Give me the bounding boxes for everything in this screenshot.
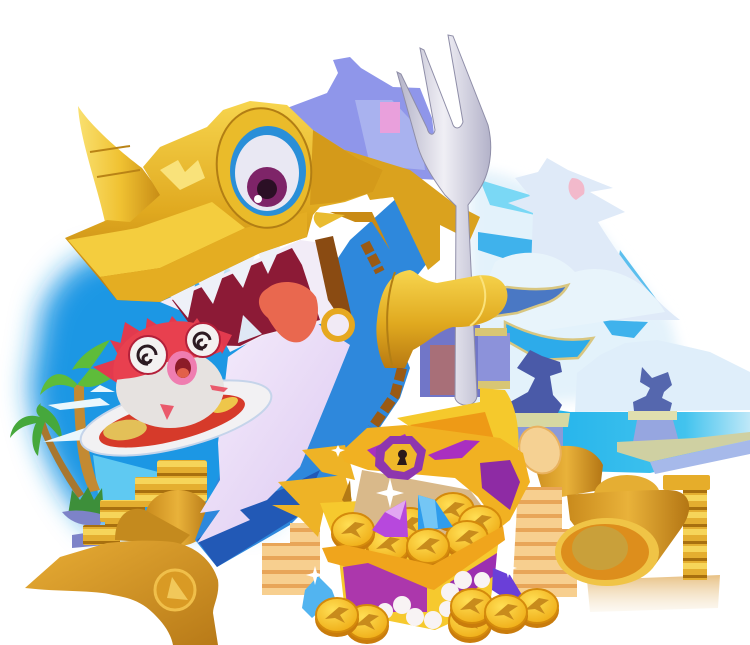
gold tail fin [25, 541, 218, 645]
chest front lid [340, 425, 530, 528]
shark gold helmet [65, 101, 390, 302]
chain [365, 243, 402, 428]
background: pale clouds [575, 340, 750, 412]
fish red head [113, 321, 224, 380]
foreground gem: blue [302, 576, 335, 618]
fish belly spikes [160, 385, 228, 420]
background: pale sky and cyan arcs [470, 170, 690, 410]
upper ingot with light coin [512, 420, 603, 500]
palm trees [10, 340, 112, 548]
fish spikes and fins [93, 316, 232, 385]
background: temple [415, 285, 593, 397]
fish eyes [129, 336, 167, 374]
gold sphere behind ingot [594, 475, 660, 515]
pufferfish [93, 316, 232, 428]
foreground gem: indigo [492, 568, 528, 605]
big gold ingot [567, 490, 689, 565]
fish mouth [167, 351, 197, 385]
chest interior [350, 470, 500, 555]
tongue [259, 282, 318, 342]
dragon statue: right [633, 367, 672, 411]
gem purple [372, 500, 408, 537]
helmet spike [314, 212, 345, 228]
lock [375, 436, 426, 480]
gem blue [418, 495, 453, 532]
eye [209, 102, 319, 234]
helmet cowl: rear [345, 150, 480, 270]
background: purple pagoda [287, 57, 440, 180]
shark body: blue back [195, 195, 428, 567]
background: pale distant pagoda [475, 158, 680, 332]
purple ribbon [367, 434, 480, 462]
pedestal and walkway: right [617, 411, 750, 474]
pedestal: centre [512, 413, 570, 447]
round gold ingot [555, 518, 659, 586]
fork [397, 35, 491, 405]
gold glove [376, 270, 507, 368]
speed lines [43, 385, 115, 442]
fish white body [116, 348, 224, 428]
left coin stacks [83, 460, 211, 546]
chest body [320, 500, 500, 630]
right coin column [663, 475, 710, 580]
light coin stack: left of chest [262, 523, 320, 595]
plate [74, 365, 278, 471]
leather strap [315, 236, 352, 318]
strap ring [324, 311, 352, 339]
sparkles [306, 445, 517, 585]
coins in chest [431, 493, 475, 532]
shark mouth [160, 240, 340, 352]
light coin stack: right of chest [512, 487, 577, 597]
shark lower fin [197, 470, 320, 567]
faded ground coins [587, 575, 720, 612]
pearls [377, 571, 490, 629]
helmet horn [78, 106, 162, 225]
chest front trim [322, 526, 505, 590]
teeth [170, 243, 282, 318]
food on plate [94, 383, 250, 459]
back lid [397, 388, 518, 450]
dragon statue: centre [510, 350, 562, 413]
left water and waves [93, 455, 170, 515]
background: water [490, 400, 750, 473]
wing feathers [272, 445, 355, 537]
foreground coins [315, 589, 559, 644]
purple panels [343, 563, 427, 612]
shark belly [197, 312, 350, 543]
background: blue glow [30, 254, 270, 530]
treasure chest [272, 388, 530, 630]
